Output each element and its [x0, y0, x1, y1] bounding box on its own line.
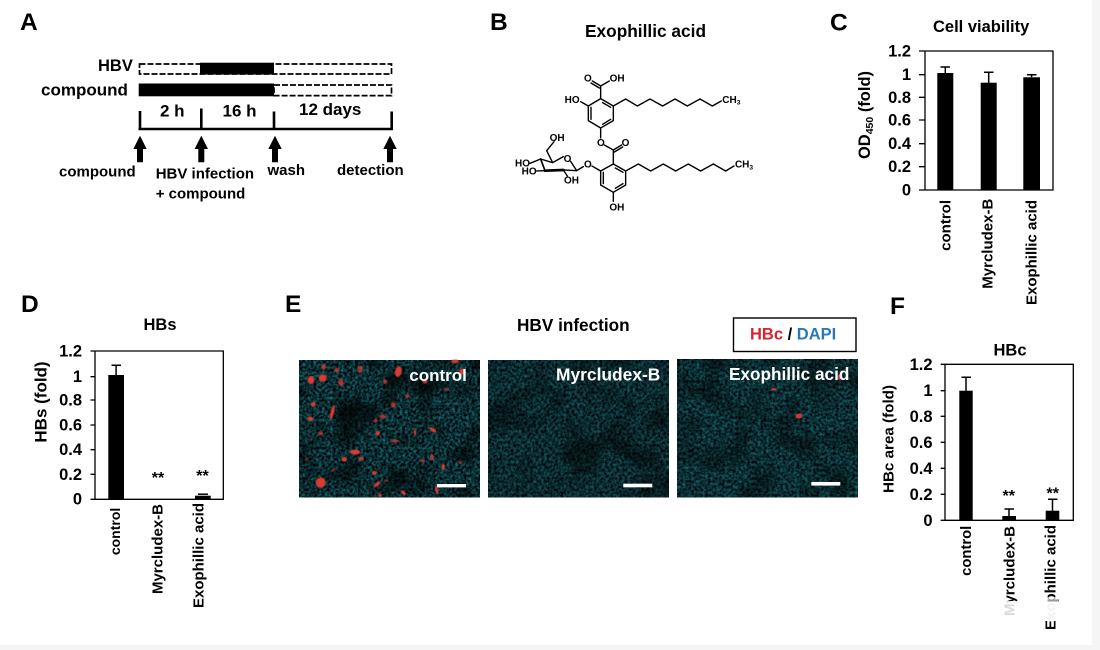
y axis tick labels: 1.2 [910, 356, 932, 374]
micrograph: control: control [409, 366, 467, 385]
molecule structure diagram: HO [522, 167, 537, 178]
x axis label: Myrcludex-B (partly erased): Myrcludex-B [1002, 526, 1018, 616]
micrograph: control [299, 360, 480, 497]
duration: 16 h: 16 h [222, 102, 257, 121]
y axis tick labels: 0 [923, 512, 932, 530]
x axis label: Myrcludex-B: Myrcludex-B [150, 504, 166, 594]
molecule structure diagram: CH [722, 95, 737, 106]
y axis tick labels: 0 [73, 490, 82, 508]
chart title: Cell viability [933, 18, 1030, 36]
bar: Exophillic acid [195, 494, 211, 499]
step label: HBV infection + compound: + compound [156, 185, 245, 202]
panel letter A: A [20, 9, 38, 36]
bar: Myrcludex-B [981, 72, 997, 190]
y axis tick labels: 0.4 [910, 460, 933, 478]
y axis label: 450 [864, 117, 876, 134]
bar: Exophillic acid [1046, 499, 1059, 520]
y axis tick labels: 1 [923, 382, 932, 400]
micrograph: Myrcludex-B: Myrcludex-B [556, 364, 660, 384]
significance: Exophillic acid: ** [1046, 486, 1060, 502]
y axis tick labels: 0.8 [910, 408, 932, 426]
chart title: HBc [993, 342, 1027, 360]
panel B: chemical structure [490, 9, 753, 213]
y axis label: (fold) [856, 71, 874, 117]
micrograph: Myrcludex-B [488, 360, 669, 497]
y axis tick labels [910, 356, 933, 530]
molecule structure diagram: O [584, 159, 592, 170]
bar: control [937, 67, 953, 190]
x axis label: Exophillic acid: Exophillic acid [190, 503, 208, 608]
bar: control [108, 365, 124, 499]
y axis tick labels [888, 42, 912, 200]
bar: control [959, 377, 973, 520]
legend: HBc / DAPI: HBc / DAPI [750, 326, 836, 344]
micrograph: Exophillic acid [677, 359, 858, 497]
step label: HBV infection + compound [156, 166, 254, 202]
x axis label: Exophillic acid (partly erased): Exophillic acid [1042, 525, 1060, 630]
y axis tick labels: 0 [902, 182, 911, 200]
compound row label: compound [41, 80, 128, 100]
panel letter F: F [890, 293, 905, 320]
significance: Myrcludex-B: ** [1002, 488, 1016, 505]
y axis tick labels: 0.4 [59, 441, 83, 459]
y axis tick labels: 1.2 [59, 342, 82, 360]
y axis tick labels: 0.6 [59, 416, 82, 434]
molecule structure diagram: O [584, 73, 592, 84]
HBV exposure bar [140, 63, 392, 74]
y axis tick labels: 0.2 [888, 158, 911, 176]
y axis tick labels: 0.6 [910, 434, 932, 452]
panel letter C: C [830, 10, 848, 36]
x axis label: control: control [938, 200, 954, 251]
molecule structure diagram: 3 [749, 164, 753, 171]
x axis label: Exophillic acid: Exophillic acid [1024, 200, 1040, 305]
x axis label: control: control [107, 508, 123, 555]
molecule structure diagram [515, 73, 753, 213]
compound name: Exophillic acid [585, 21, 706, 41]
molecule structure diagram: OH [564, 176, 579, 187]
y axis tick labels: 1 [73, 368, 82, 386]
molecule structure diagram: OH [550, 133, 565, 144]
panel F: HBc area chart [880, 293, 1073, 630]
molecule structure diagram: CH [735, 160, 749, 171]
legend: HBc / DAPI [734, 318, 856, 352]
x axis label: control: control [959, 526, 975, 576]
panel D: HBs chart [21, 291, 223, 608]
panel letter B: B [490, 9, 508, 36]
molecule structure diagram: O [622, 138, 630, 149]
time axis [138, 108, 393, 129]
panel letter E: E [285, 291, 301, 318]
chart title: HBs [143, 316, 177, 334]
significance: Exophillic acid: ** [196, 468, 210, 485]
y axis label: HBc area (fold) [880, 385, 898, 493]
molecule structure diagram: OH [609, 202, 624, 213]
x axis label: Myrcludex-B: Myrcludex-B [980, 199, 996, 289]
compound exposure bar [139, 84, 392, 96]
panel A: experimental timeline [20, 9, 404, 202]
plot frame and ticks [90, 351, 223, 499]
panel E: HBV infection micrographs [285, 291, 858, 497]
significance: Myrcludex-B: ** [152, 470, 165, 487]
bar: Myrcludex-B [1002, 509, 1016, 520]
molecule structure diagram: 3 [737, 100, 741, 107]
step label: HBV infection + compound: HBV infection [156, 166, 254, 182]
duration: 2 h: 2 h [160, 102, 185, 121]
panel letter D: D [21, 291, 39, 318]
y axis tick labels: 0.6 [888, 112, 911, 130]
y axis label: OD [856, 134, 874, 159]
duration: 12 days: 12 days [299, 100, 361, 119]
step label: wash: wash [266, 162, 305, 179]
plot frame and ticks [919, 51, 1053, 190]
HBV row label: HBV [98, 57, 133, 75]
molecule structure diagram: OH [610, 73, 625, 84]
plot frame and ticks [941, 364, 1073, 520]
panel heading: HBV infection [517, 315, 630, 335]
bar: Exophillic acid [1023, 75, 1040, 190]
y axis label: HBs (fold) [32, 361, 50, 443]
molecule structure diagram: O [597, 138, 605, 149]
panel C: cell viability chart [830, 10, 1053, 305]
y axis tick labels: 0.2 [59, 466, 82, 484]
y axis tick labels: 0.4 [888, 135, 912, 153]
step label: detection: detection [337, 162, 404, 179]
molecule structure diagram: O [564, 154, 572, 165]
molecule structure diagram: HO [515, 158, 530, 169]
timeline arrows [133, 136, 397, 162]
y axis tick labels: 0.8 [59, 392, 82, 410]
molecule structure diagram: HO [565, 95, 580, 106]
y axis tick labels: 1 [902, 66, 911, 84]
micrograph: Exophillic acid: Exophillic acid [729, 364, 849, 384]
y axis tick labels [59, 342, 83, 508]
step label: compound: compound [59, 164, 136, 181]
y axis tick labels: 0.8 [888, 89, 911, 107]
y axis tick labels: 0.2 [910, 486, 932, 504]
y axis tick labels: 1.2 [888, 42, 911, 60]
